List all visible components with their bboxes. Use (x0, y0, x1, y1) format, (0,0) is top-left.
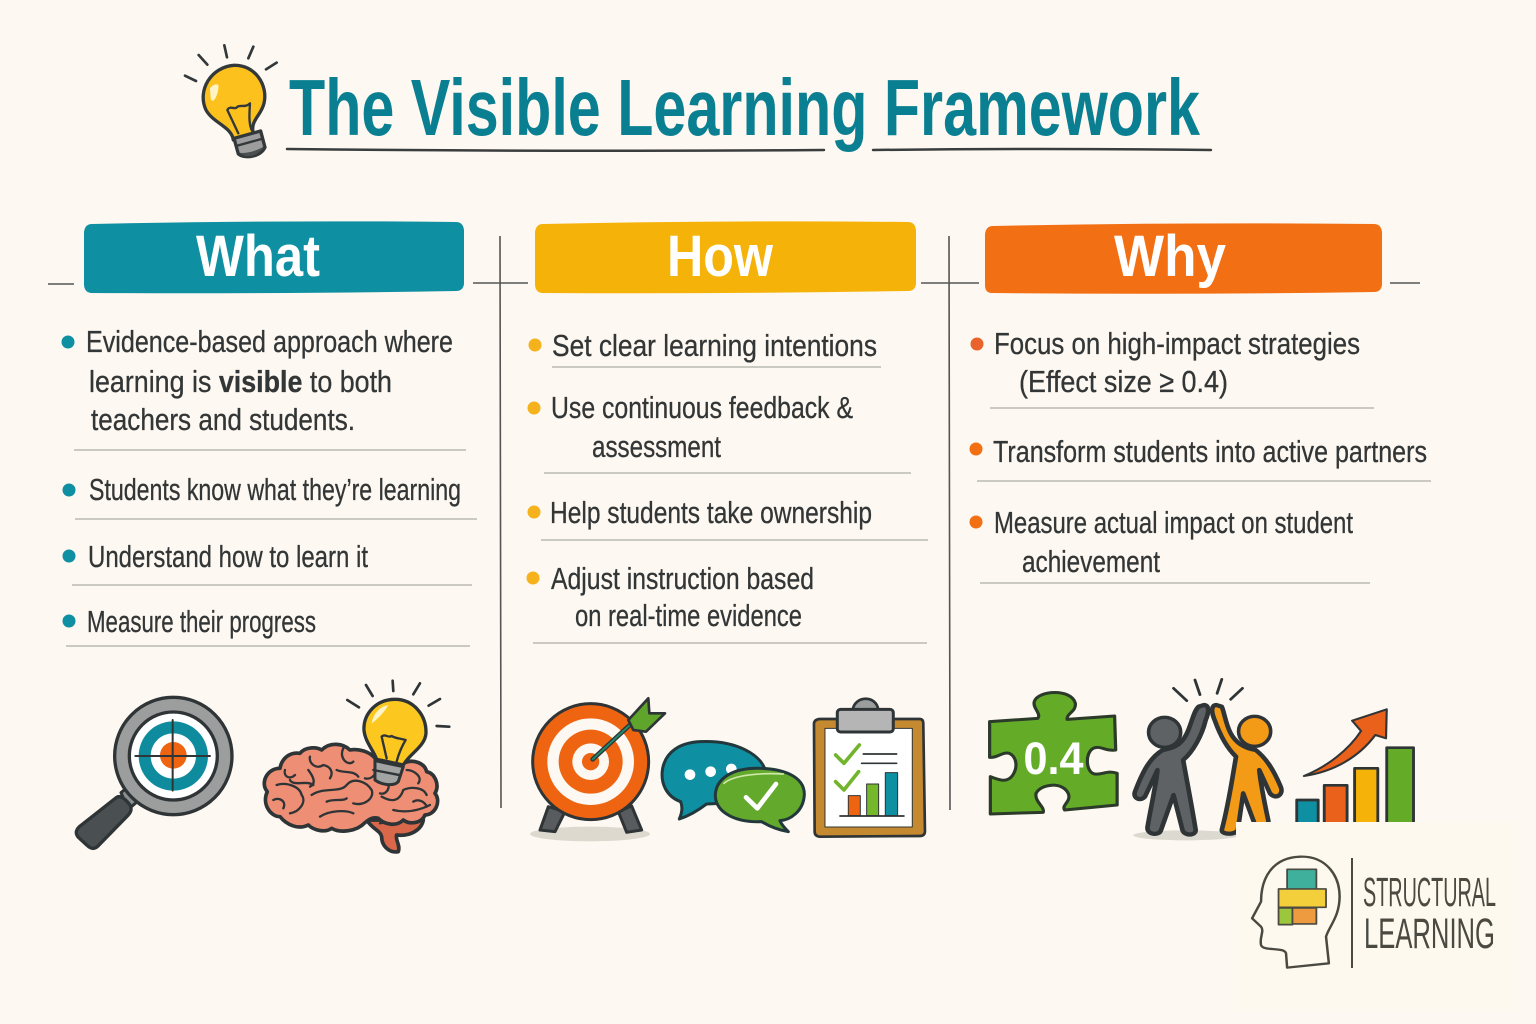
bullet: students know (62, 472, 477, 519)
bullet: students know: Students know what they’re learning (89, 472, 461, 507)
title: The Visible Learning Framework (289, 63, 1200, 152)
icon: title light bulb (185, 45, 277, 157)
logo wordmark (1363, 869, 1496, 958)
bullet: high-impact strategies: Focus on high-impact strategies (994, 326, 1360, 361)
icon: clipboard with checks and chart (814, 699, 925, 837)
bullet: active partners (970, 434, 1431, 481)
bullet: ownership: Help students take ownership (550, 495, 872, 530)
bullet: measure impact: achievement (1022, 544, 1160, 579)
bullet: measure impact (970, 505, 1370, 583)
bullet: adjust instruction: Adjust instruction based (551, 561, 814, 596)
bullet: high-impact strategies (970, 326, 1374, 408)
bullet: measure progress (62, 604, 470, 646)
bullet: measure impact: Measure actual impact on student (994, 505, 1353, 540)
heading: How (535, 221, 916, 293)
icon: archery target with arrow (530, 698, 665, 841)
logo head (1252, 857, 1340, 968)
icon: two people high-fiving (1133, 679, 1281, 840)
bullet: ownership (528, 495, 928, 540)
icon: puzzle piece with 0.4 (990, 692, 1117, 814)
heading: What (84, 221, 464, 293)
heading: Why: Why (1114, 224, 1226, 289)
bullet: evidence-based approach: learning is visible to both (89, 364, 392, 399)
panel: What (62, 221, 477, 646)
heading: Why (985, 223, 1382, 294)
icon: rising bar chart with arrow (1297, 709, 1414, 837)
bullet: continuous feedback: assessment (592, 429, 721, 464)
icon: magnifying glass over target (76, 697, 232, 848)
panel: Why (970, 223, 1431, 583)
bullet: continuous feedback: Use continuous feedback & (551, 390, 853, 425)
bullet: evidence-based approach: Evidence-based approach where (86, 324, 453, 359)
icon: puzzle piece with 0.4: 0.4 (1024, 732, 1084, 784)
bullet: evidence-based approach (62, 324, 466, 450)
bullet: understand: Understand how to learn it (88, 539, 368, 574)
heading: What: What (196, 224, 320, 289)
bullet: evidence-based approach: teachers and students. (91, 402, 355, 437)
panel: How (526, 221, 928, 643)
bullet: high-impact strategies: (Effect size ≥ 0.4) (1019, 364, 1228, 399)
bullet: adjust instruction: on real-time evidence (575, 598, 802, 633)
icon: brain with light bulb (264, 681, 449, 852)
icon: chat bubbles (662, 742, 804, 832)
bullet: learning intentions: Set clear learning intentions (552, 328, 877, 363)
bullet: adjust instruction (526, 561, 927, 643)
heading: How: How (667, 224, 774, 289)
logo: Structural Learning (1236, 822, 1516, 1010)
bullet: continuous feedback (528, 390, 911, 473)
bullet: measure progress: Measure their progress (87, 604, 316, 639)
logo divider (1351, 858, 1353, 968)
bullet: active partners: Transform students into active partners (993, 434, 1427, 469)
bullet: understand (62, 539, 472, 585)
title underline (287, 149, 1211, 151)
